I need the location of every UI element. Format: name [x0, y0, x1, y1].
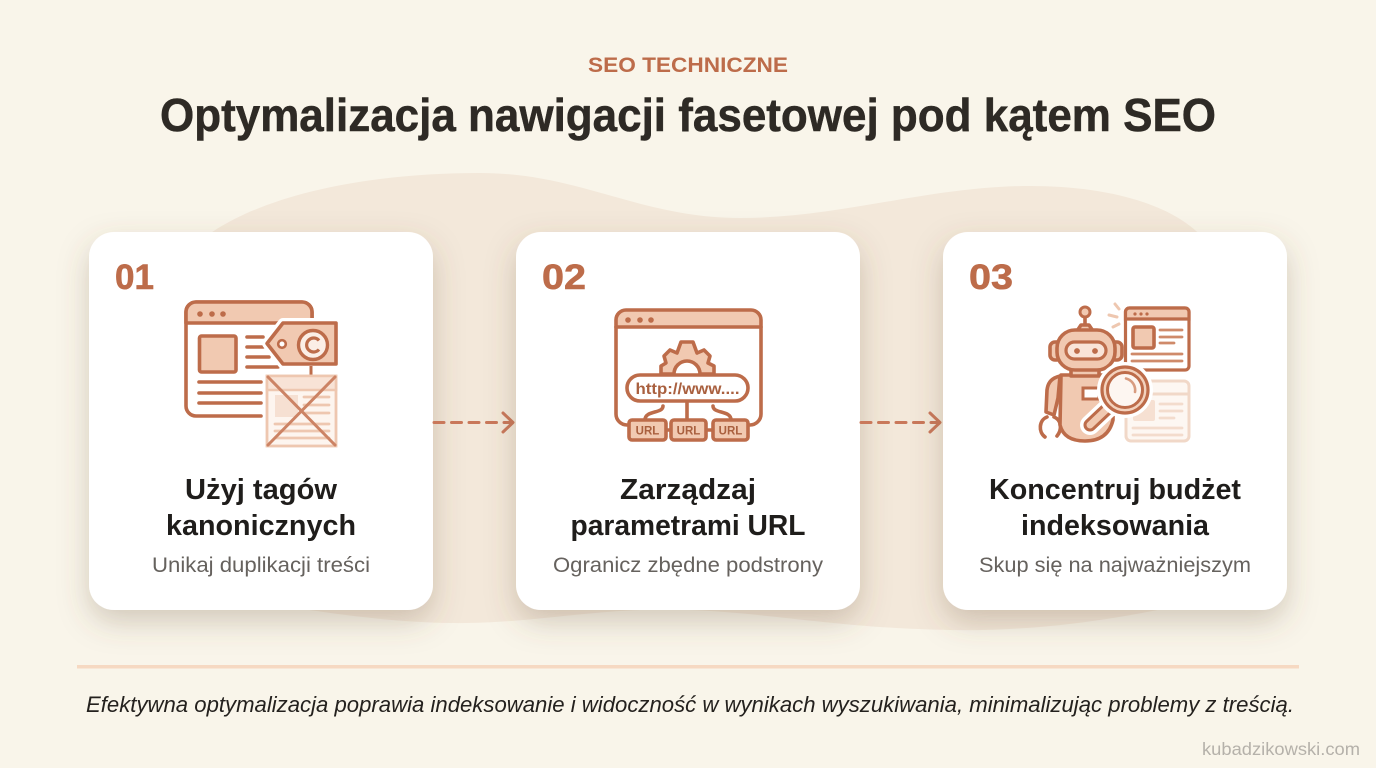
icon part: URL boxes: URL [719, 426, 742, 438]
icon part: URL boxes [629, 420, 748, 440]
step 2 heading [570, 474, 806, 542]
step 3 heading: Koncentruj budżet [989, 474, 1241, 506]
panel: step 1 [89, 232, 433, 610]
arrow: step 1 to 2 [434, 413, 513, 432]
step 1 description: Unikaj duplikacji treści [152, 553, 370, 577]
arrow: step 2 to 3 [861, 413, 940, 432]
step 3 heading [989, 474, 1241, 542]
step 3 description: Skup się na najważniejszym [979, 553, 1251, 577]
magnifier [1090, 362, 1153, 425]
icon: canonical tag on page [186, 302, 336, 446]
step number 01: 01 [115, 258, 154, 297]
faded page [1126, 381, 1189, 441]
panel: step 2 [516, 232, 860, 610]
panel: step 3 [943, 232, 1287, 610]
step 2 heading: parametrami URL [570, 510, 806, 542]
step 1 heading [166, 474, 356, 542]
robot [1040, 307, 1122, 441]
step 2 heading: Zarządzaj [620, 474, 756, 506]
step number 03: 03 [969, 258, 1013, 297]
icon part: address pill: http://www.... [636, 381, 740, 398]
eyebrow: SEO TECHNICZNE [588, 54, 788, 77]
step 1 heading: kanonicznych [166, 510, 356, 542]
background blob [190, 173, 1205, 630]
icon: robot with magnifier [1040, 304, 1189, 441]
crawled page [1126, 308, 1189, 370]
icon part: address pill [627, 375, 748, 401]
icon part: URL boxes: URL [677, 426, 700, 438]
summary text: Efektywna optymalizacja poprawia indeksowanie i widoczność w wynikach wyszukiwania, minimalizując problemy z treścią. [86, 692, 1294, 717]
step 2 description: Ogranicz zbędne podstrony [553, 553, 823, 577]
step 3 heading: indeksowania [1021, 510, 1210, 542]
icon part: URL boxes: URL [636, 426, 659, 438]
step number 02: 02 [542, 258, 586, 297]
icon: URL parameters [616, 310, 761, 440]
step 1 heading: Użyj tagów [185, 474, 337, 506]
sparks [1109, 304, 1119, 327]
watermark: kubadzikowski.com [1202, 739, 1360, 759]
title: Optymalizacja nawigacji fasetowej pod kątem SEO [160, 89, 1216, 141]
icon part: gear [661, 342, 714, 374]
